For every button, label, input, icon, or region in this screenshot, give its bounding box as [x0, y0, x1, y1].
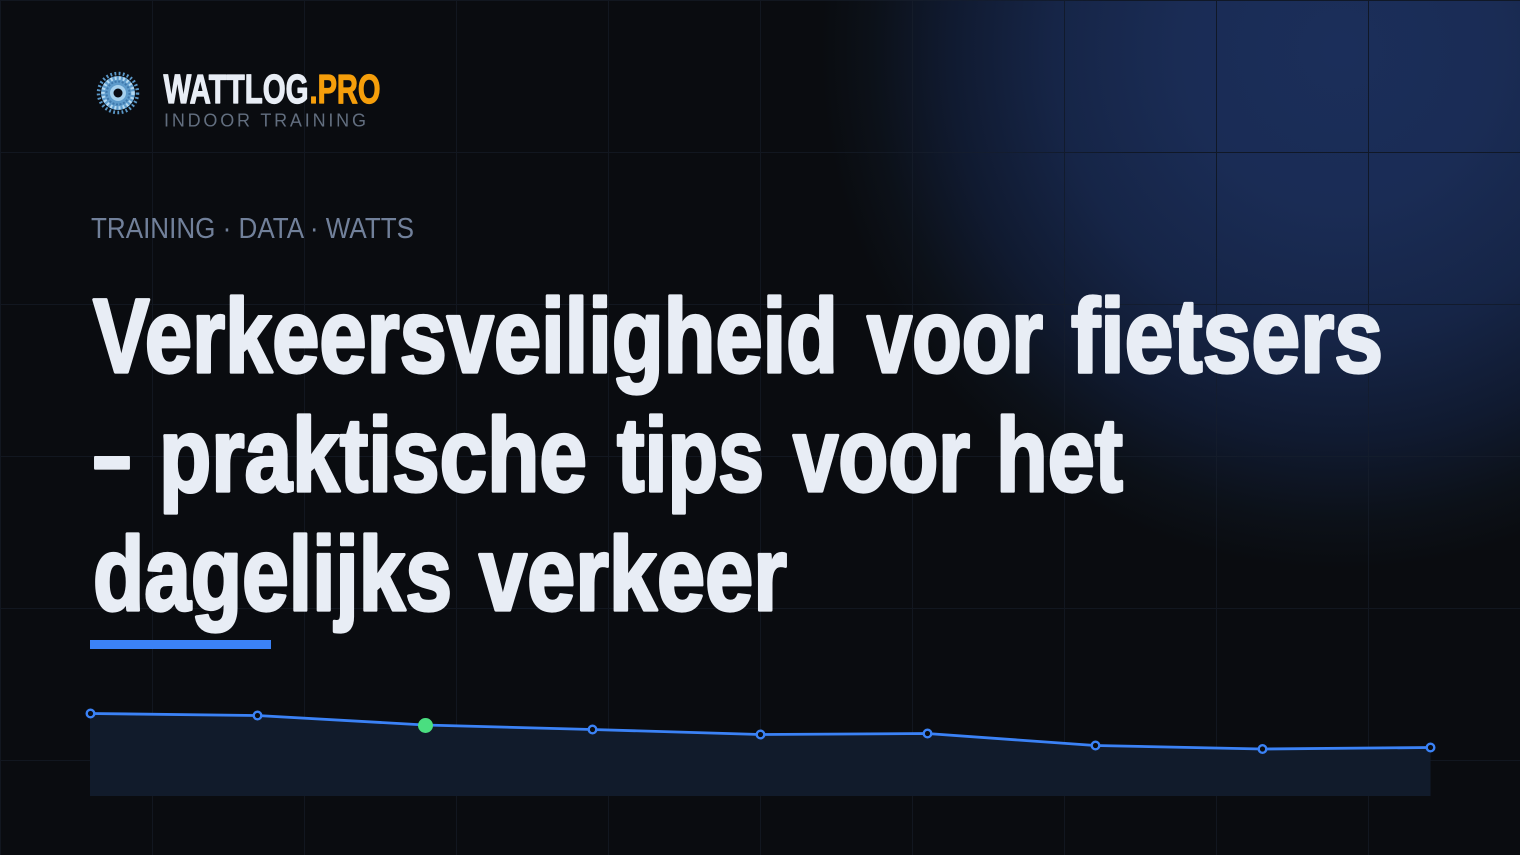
title: voor	[793, 397, 970, 514]
title: voor	[867, 278, 1043, 395]
wordmark: WATTLOG	[164, 66, 308, 112]
eyebrow: TRAINING · DATA · WATTS	[91, 213, 414, 245]
title: praktische	[159, 397, 587, 514]
title: Verkeersveiligheid	[93, 278, 838, 395]
line chart	[87, 710, 1434, 796]
title	[93, 278, 1383, 633]
wordmark: .PRO	[310, 66, 380, 112]
tagline: indoor training: INDOOR TRAINING	[164, 110, 366, 130]
title: –	[93, 397, 131, 514]
logo	[98, 66, 380, 130]
highlighted marker	[418, 718, 433, 733]
chart markers	[87, 710, 1434, 753]
title: tips	[617, 397, 764, 514]
icon: cassette gear	[98, 74, 138, 112]
title: fietsers	[1071, 278, 1383, 395]
chart area fill	[90, 714, 1430, 796]
title: het	[996, 397, 1123, 514]
title: dagelijks	[93, 516, 452, 633]
accent underline	[90, 640, 271, 649]
title: verkeer	[479, 516, 787, 633]
chart line	[90, 714, 1430, 749]
